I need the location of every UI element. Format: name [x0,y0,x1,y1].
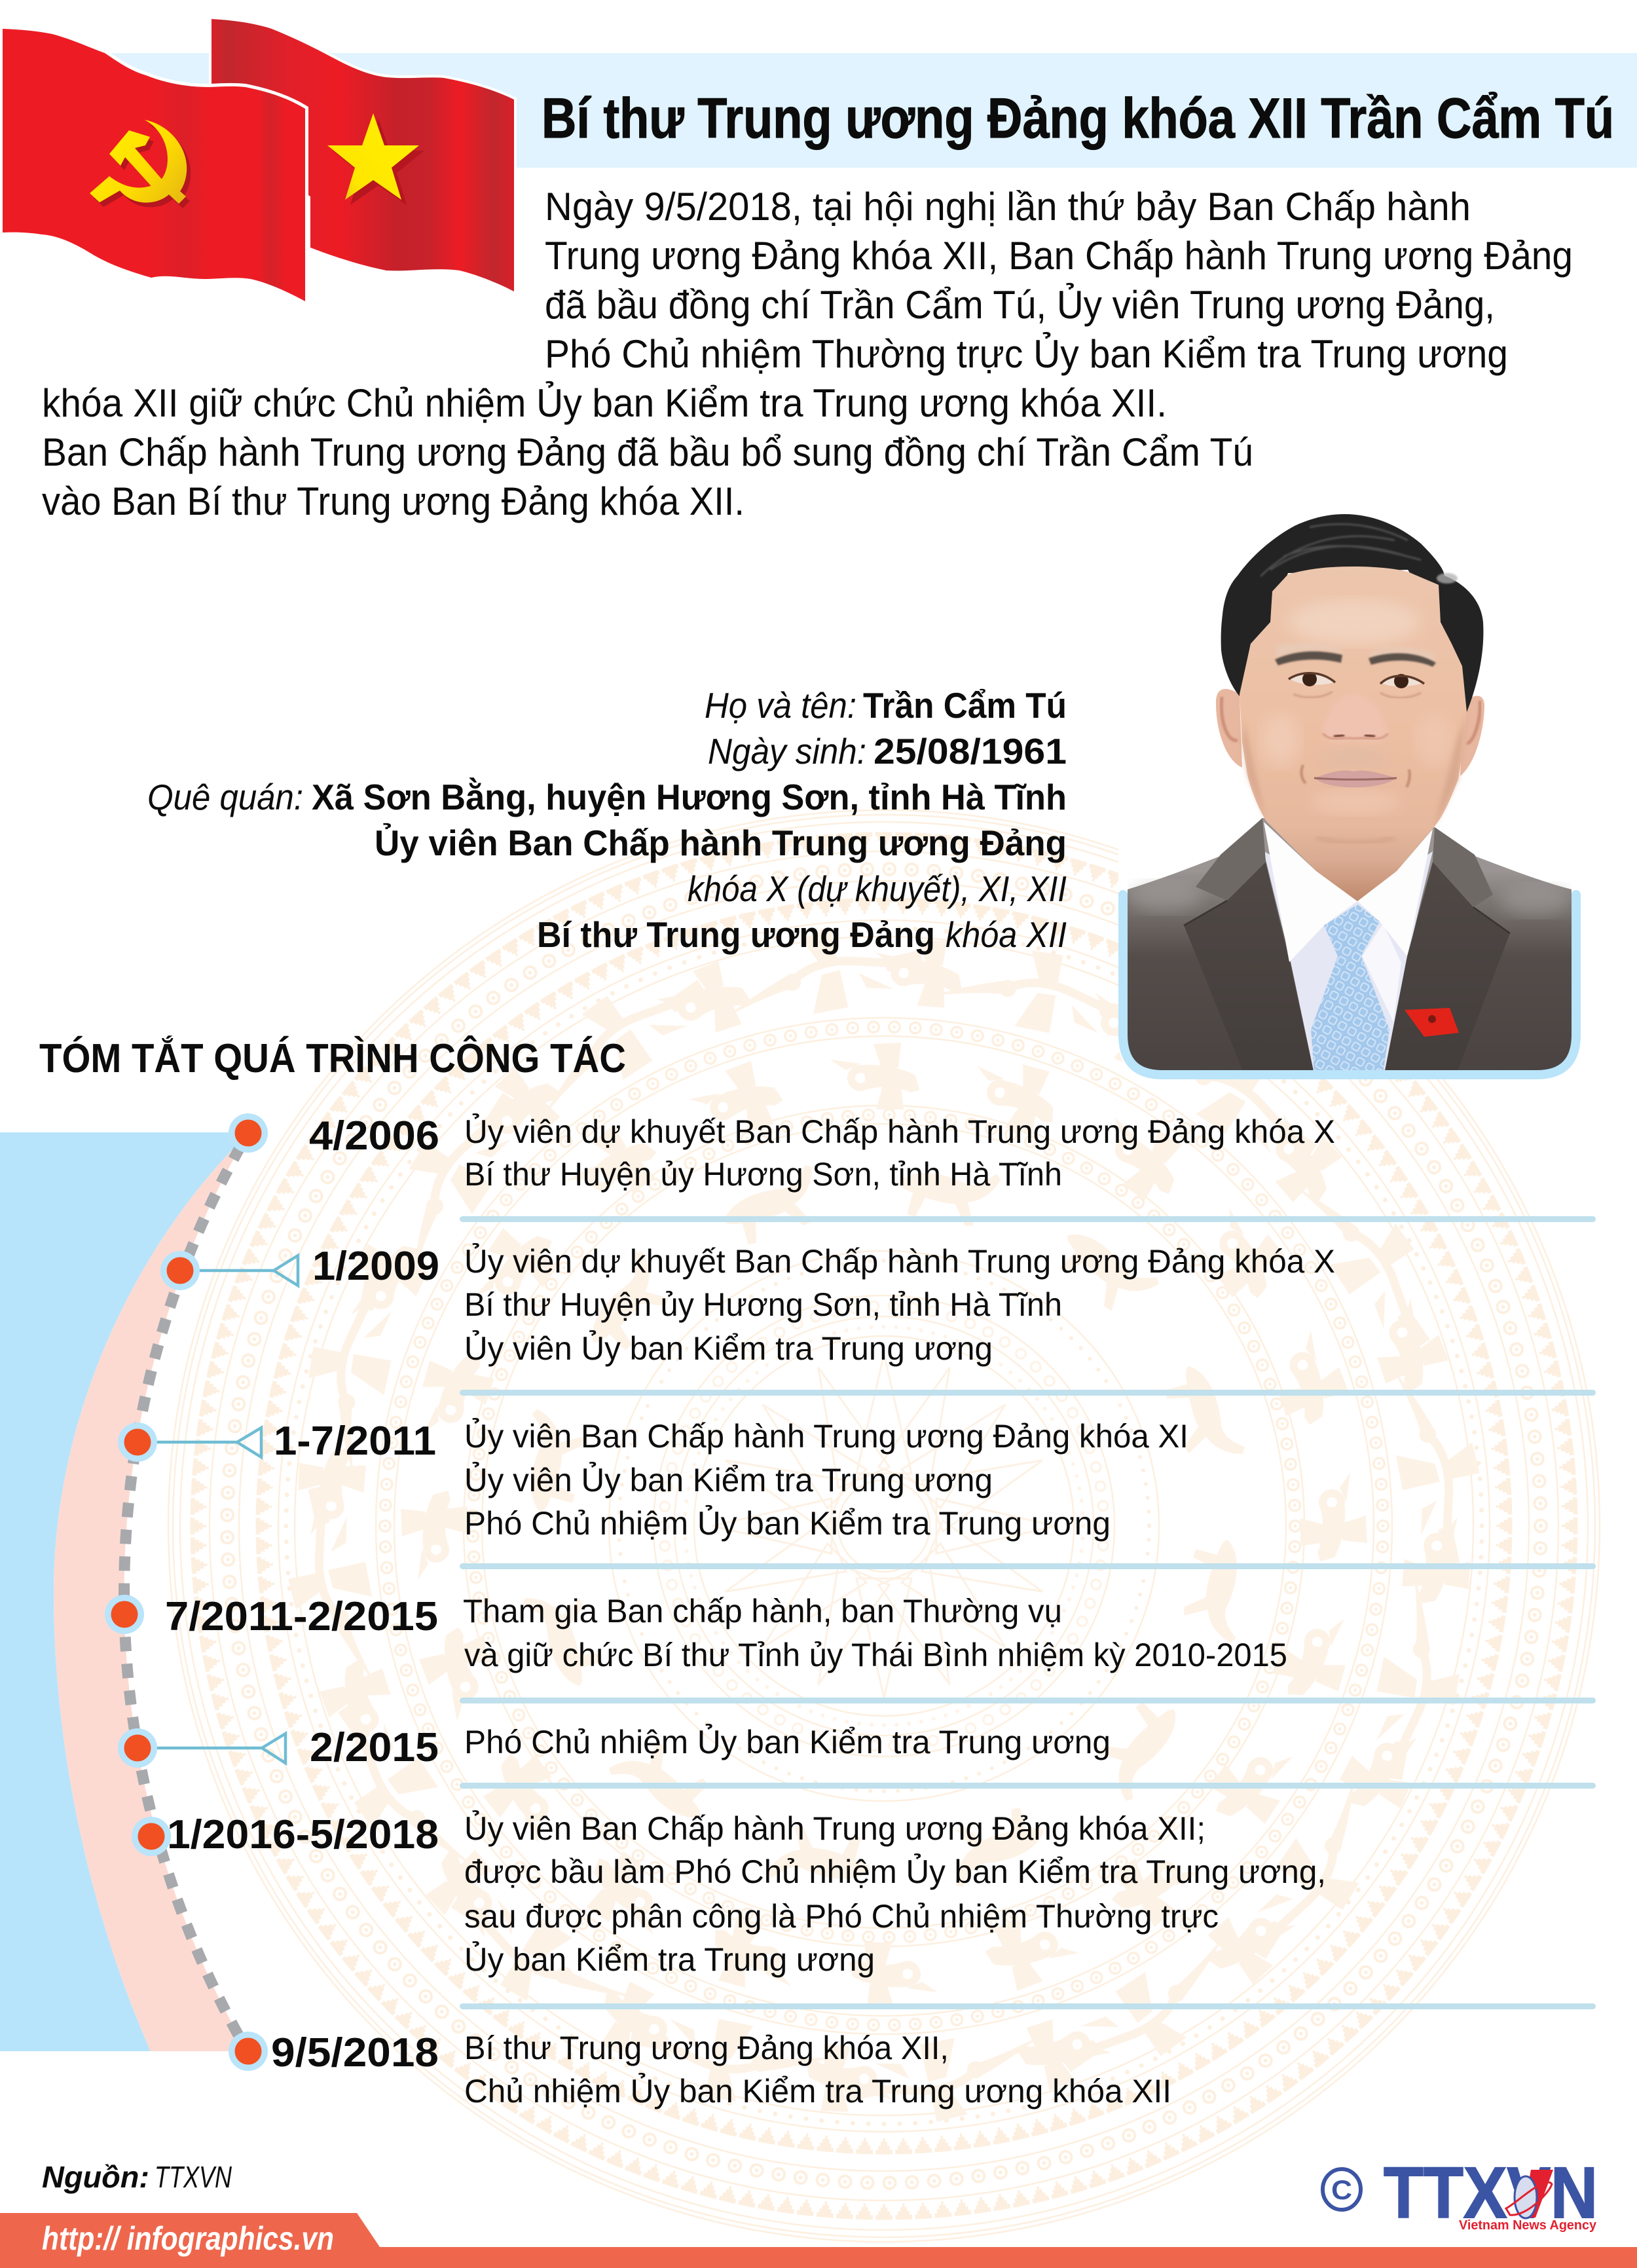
blue side area [0,1132,248,2051]
intro paragraph [42,185,1573,523]
facial features [1242,600,1467,843]
lapels [1184,818,1510,1074]
position: secretariat: khóa XII [946,914,1067,955]
header band [108,53,1637,168]
entry: 4/2006: 4/2006 [309,1113,439,1159]
entry: 1-7/2011 [274,1417,1188,1542]
entry: 4/2006: Bí thư Huyện ủy Hương Sơn, tỉnh Hà Tĩnh [464,1156,1062,1193]
position: secretariat: Bí thư Trung ương Đảng [537,914,935,955]
icon: yellow star [327,113,424,205]
source: TTXVN [155,2160,232,2194]
connector: 1/2009 [196,1255,298,1286]
shirt and collar [1264,822,1433,1074]
timeline graphic [0,1113,298,2071]
entry: 7/2011-2/2015: và giữ chức Bí thư Tỉnh ủy Thái Bình nhiệm kỳ 2010-2015 [464,1637,1287,1673]
entry: 1/2009: 1/2009 [312,1244,439,1289]
photo frame [1123,895,1576,1075]
full name: Họ và tên: [705,685,856,726]
intro paragraph: Ngày 9/5/2018, tại hội nghị lần thứ bảy Ban Chấp hành [545,185,1471,229]
entry: 7/2011-2/2015: 7/2011-2/2015 [165,1594,438,1639]
face and neck [1240,567,1467,901]
source [42,2160,232,2194]
flag: Communist Party flag [3,29,305,301]
portrait photo [1118,491,1581,1079]
entry: 1/2016-5/2018: 1/2016-5/2018 [167,1812,439,1857]
entry: 1/2009 [312,1242,1335,1367]
agency tagline: Vietnam News Agency [1459,2218,1597,2233]
entry: 9/5/2018: Bí thư Trung ương Đảng khóa XII, [464,2030,949,2066]
connector: 2/2015 [154,1734,285,1763]
entry: 1-7/2011: Ủy viên Ủy ban Kiểm tra Trung ương [464,1461,993,1498]
section heading: TÓM TẮT QUÁ TRÌNH CÔNG TÁC [39,1036,626,1081]
necktie [1311,904,1389,1074]
entry: 7/2011-2/2015 [165,1593,1287,1673]
logo: TTXVN [1323,2153,1598,2233]
date of birth [708,731,1067,771]
entry: 2/2015 [310,1723,1111,1770]
intro paragraph: đã bầu đồng chí Trần Cẩm Tú, Ủy viên Trung ương Đảng, [545,283,1495,327]
ears [1216,689,1484,776]
profile details [147,685,1067,955]
intro paragraph: vào Ban Bí thư Trung ương Đảng khóa XII. [42,479,745,523]
flag: Vietnam national flag [212,19,514,291]
entry: 1/2016-5/2018: Ủy ban Kiểm tra Trung ương [464,1941,875,1978]
full name: Trần Cẩm Tú [863,685,1067,726]
date of birth: 25/08/1961 [874,731,1067,771]
intro paragraph: Trung ương Đảng khóa XII, Ban Chấp hành Trung ương Đảng [545,234,1573,278]
intro paragraph: Ban Chấp hành Trung ương Đảng đã bầu bổ sung đồng chí Trần Cẩm Tú [42,430,1253,474]
entry: 1/2016-5/2018: sau được phân công là Phó Chủ nhiệm Thường trực [464,1898,1219,1935]
agency wordmark: TTXVN [1384,2153,1598,2233]
hair [1221,514,1483,714]
copyright mark: C [1331,2174,1352,2205]
position: terms: khóa X (dự khuyết), XI, XII [688,868,1067,909]
entry: 1/2009: Bí thư Huyện ủy Hương Sơn, tỉnh Hà Tĩnh [464,1286,1062,1323]
party badge [1405,1008,1459,1037]
entry: 1/2009: Ủy viên dự khuyết Ban Chấp hành Trung ương Đảng khóa X [464,1242,1335,1280]
entry: 7/2011-2/2015: Tham gia Ban chấp hành, ban Thường vụ [463,1593,1062,1629]
entry: 4/2006 [309,1113,1335,1193]
connector: 1-7/2011 [154,1428,261,1457]
entry: 9/5/2018 [271,2030,1171,2110]
entry: 2/2015: 2/2015 [310,1725,439,1770]
entry: 9/5/2018: 9/5/2018 [271,2030,439,2075]
source: Nguồn: [42,2160,149,2194]
suit [1128,818,1572,1074]
website link: http:// infographics.vn [42,2220,334,2257]
hometown: Quê quán: [147,777,303,817]
hometown: Xã Sơn Bằng, huyện Hương Sơn, tỉnh Hà Tĩnh [312,777,1067,817]
entry: 1/2016-5/2018 [167,1810,1326,1978]
timeline dots [105,1113,268,2071]
entry: 4/2006: Ủy viên dự khuyết Ban Chấp hành Trung ương Đảng khóa X [464,1113,1335,1150]
copyright mark [1323,2169,1361,2210]
intro paragraph: khóa XII giữ chức Chủ nhiệm Ủy ban Kiểm tra Trung ương khóa XII. [42,381,1167,425]
entry: 2/2015: Phó Chủ nhiệm Ủy ban Kiểm tra Trung ương [464,1723,1111,1760]
entry: 9/5/2018: Chủ nhiệm Ủy ban Kiểm tra Trung ương khóa XII [464,2072,1171,2110]
date of birth: Ngày sinh: [708,731,866,771]
full name [705,685,1067,726]
entry: 1/2016-5/2018: Ủy viên Ban Chấp hành Trung ương Đảng khóa XII; [464,1810,1205,1847]
pink arc area [54,1133,248,2051]
flags [3,19,514,301]
entry: 1-7/2011: Phó Chủ nhiệm Ủy ban Kiểm tra Trung ương [464,1504,1111,1542]
entry: 1-7/2011: Ủy viên Ban Chấp hành Trung ương Đảng khóa XI [464,1417,1188,1455]
entry: 1-7/2011: 1-7/2011 [274,1419,436,1464]
icon: hammer and sickle [90,120,191,208]
entry: 1/2009: Ủy viên Ủy ban Kiểm tra Trung ương [464,1329,993,1367]
dashed timeline arc [124,1133,248,2051]
footer bar [0,2213,1637,2268]
entry: 1/2016-5/2018: được bầu làm Phó Chủ nhiệm Ủy ban Kiểm tra Trung ương, [464,1853,1326,1890]
timeline dividers [460,1216,1596,2009]
background: bronze drum pattern [168,810,1600,2242]
intro paragraph: Phó Chủ nhiệm Thường trực Ủy ban Kiểm tra Trung ương [545,332,1508,376]
position: central committee: Ủy viên Ban Chấp hành Trung ương Đảng [375,823,1067,863]
